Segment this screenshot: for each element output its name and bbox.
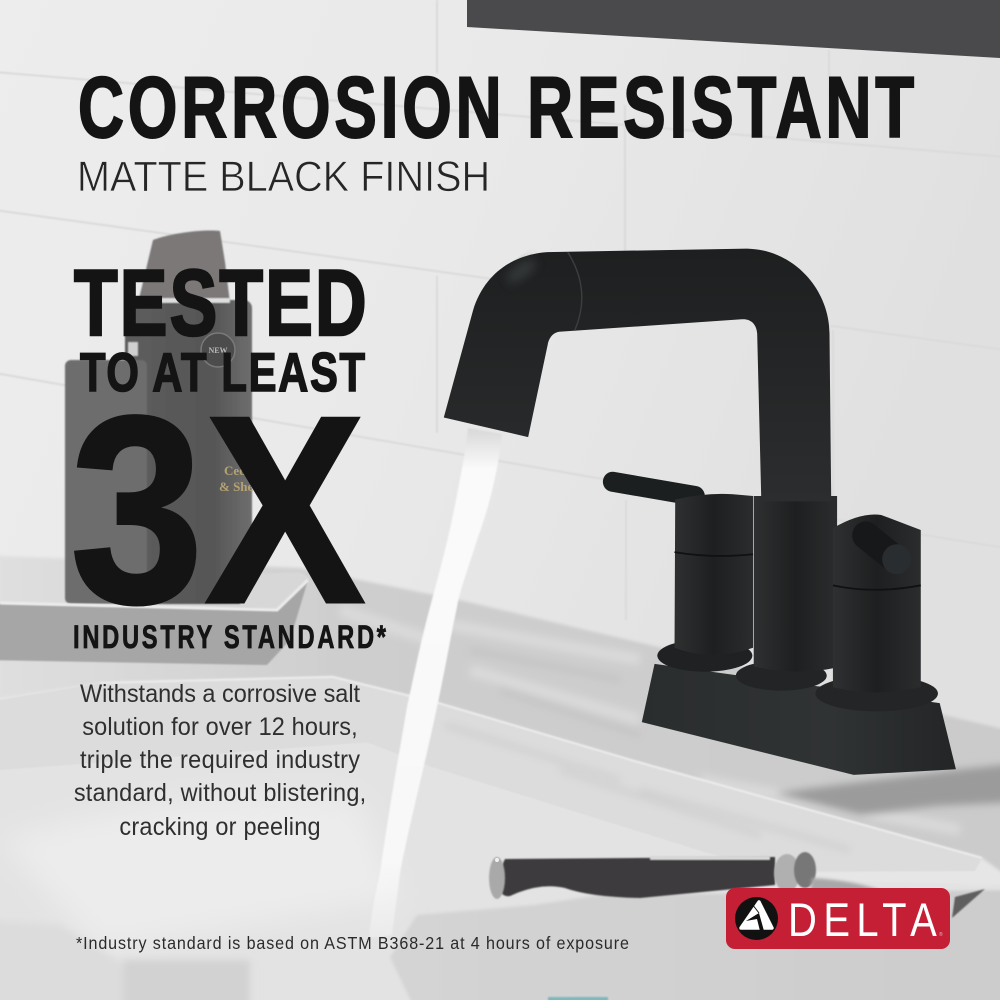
3X: 3X <box>70 360 365 659</box>
left handle base <box>657 640 752 672</box>
bottle badge <box>201 333 235 367</box>
chrome razor handle <box>489 852 985 918</box>
centre base <box>736 661 827 691</box>
centre column <box>754 496 837 672</box>
deck plate <box>642 664 956 775</box>
left handle <box>675 494 753 655</box>
running water <box>369 428 502 938</box>
bottle label: Cedar <box>224 463 259 478</box>
towel <box>390 890 1000 1000</box>
to at least: TO AT LEAST <box>80 343 365 403</box>
description: solution for over 12 hours, <box>82 713 358 741</box>
footnote: *Industry standard is based on ASTM B368-21 at 4 hours of exposure <box>76 933 629 953</box>
title: CORROSION RESISTANT <box>78 61 914 156</box>
spout <box>444 249 831 501</box>
drain <box>123 960 250 1000</box>
counter edge <box>0 677 982 872</box>
faucet shadow <box>775 763 1000 815</box>
icon: delta triangle <box>735 897 778 940</box>
bottle label: & Shea <box>219 479 260 494</box>
description: cracking or peeling <box>119 813 321 841</box>
tray <box>0 572 310 665</box>
mirror frame <box>467 0 1000 58</box>
bottle label <box>219 463 260 494</box>
faucet <box>444 249 956 775</box>
claim: tested to at least 3X <box>70 249 386 659</box>
sink basin <box>0 743 1000 1000</box>
wordmark: DELTA <box>788 895 937 947</box>
logo: Delta <box>726 888 950 949</box>
description: triple the required industry <box>80 746 361 774</box>
industry standard: INDUSTRY STANDARD* <box>73 620 386 655</box>
left lever <box>613 482 695 496</box>
blue packaging <box>548 997 608 1000</box>
right handle base <box>815 676 938 711</box>
tiled wall <box>0 0 1000 760</box>
tested: TESTED <box>74 249 367 355</box>
right handle <box>833 515 921 692</box>
subtitle: MATTE BLACK FINISH <box>77 152 490 200</box>
description: Withstands a corrosive salt <box>80 680 360 708</box>
product bottles <box>65 230 260 604</box>
registered mark: ® <box>939 931 943 938</box>
countertop <box>0 555 1000 885</box>
description: standard, without blistering, <box>74 779 366 807</box>
description <box>74 680 366 841</box>
right lever <box>866 535 897 560</box>
bottle badge: NEW <box>208 346 228 355</box>
